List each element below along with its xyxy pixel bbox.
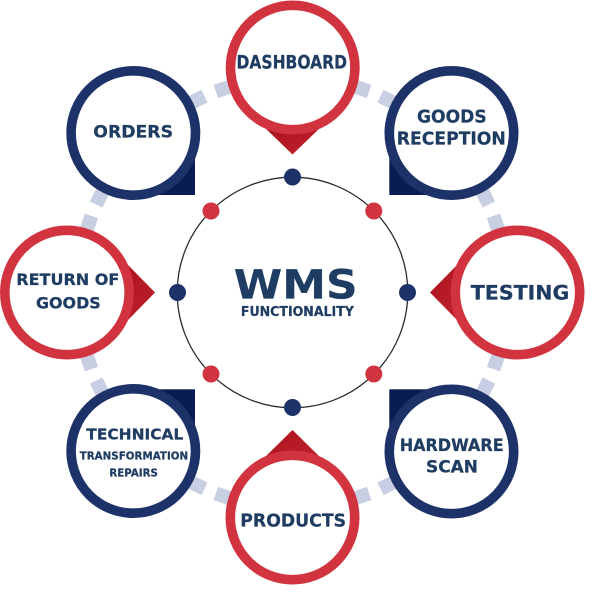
node: orders: ORDERS	[93, 123, 173, 142]
node: return of goods	[5, 230, 155, 355]
node: dashboard	[231, 5, 355, 154]
node: goods reception	[389, 71, 514, 195]
node: hardware scan: SCAN	[426, 458, 478, 477]
node: technical transformation repairs	[71, 389, 196, 513]
node: goods reception: RECEPTION	[397, 130, 506, 150]
node: products: PRODUCTS	[240, 511, 346, 532]
central circle	[169, 168, 416, 416]
node: hardware scan	[389, 389, 514, 514]
node: technical transformation repairs: REPAIRS	[109, 467, 158, 480]
node: testing: TESTING	[471, 281, 569, 304]
node: hardware scan: HARDWARE	[400, 436, 504, 455]
node: return of goods: RETURN OF	[16, 270, 119, 289]
node: dashboard: DASHBOARD	[236, 52, 347, 74]
node dots	[169, 168, 416, 416]
node: orders	[71, 71, 196, 195]
dashed outer connector ring	[80, 80, 505, 505]
node: products	[230, 430, 355, 580]
node: technical transformation repairs: TRANSFORMATION	[80, 449, 188, 462]
node: return of goods: GOODS	[36, 293, 101, 312]
subtitle: functionality: FUNCTIONALITY	[241, 305, 354, 320]
node: technical transformation repairs: TECHNICAL	[86, 425, 183, 443]
node: goods reception: GOODS	[417, 108, 487, 128]
title: WMS: WMS	[234, 262, 358, 308]
node: testing	[430, 230, 580, 355]
